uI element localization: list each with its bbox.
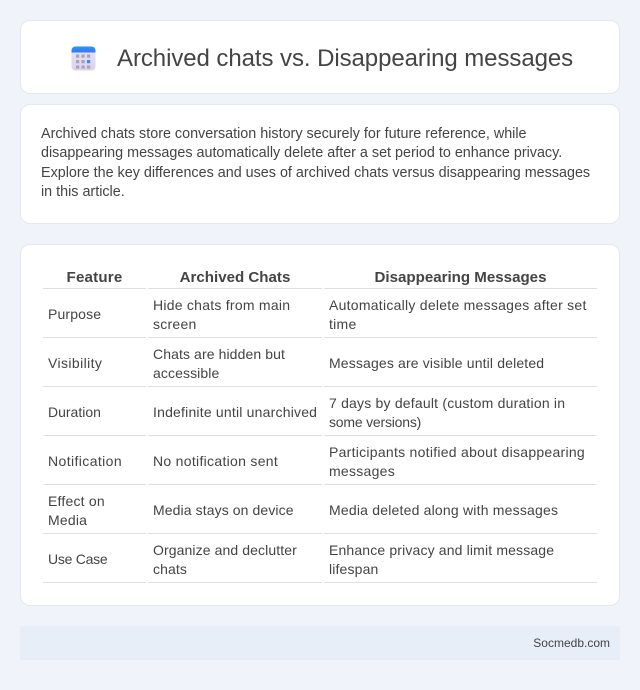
row: use case: Enhance privacy and limit message: [329, 542, 554, 558]
row: use case: Use Case: [48, 551, 107, 567]
row: effect on media: Media: [48, 512, 87, 528]
text block: introduction: disappearing messages automatically delete after a set period to enhance privacy.: [41, 145, 562, 161]
row: notification: [48, 444, 585, 479]
row: duration: Duration: [48, 404, 101, 420]
row: duration: 7 days by default (custom duration in: [329, 395, 565, 411]
table header: Disappearing Messages: [374, 269, 546, 286]
panel: introduction: [20, 104, 620, 224]
footer credit: Socmedb.com: [533, 636, 610, 650]
row: notification: No notification sent: [153, 453, 278, 469]
row: notification: messages: [329, 462, 395, 478]
row: purpose: time: [329, 316, 356, 332]
footer bar: [20, 626, 620, 660]
text block: introduction: in this article.: [41, 184, 125, 200]
row: visibility: accessible: [153, 364, 219, 380]
title: Archived chats vs. Disappearing messages: [117, 45, 573, 72]
row: purpose: screen: [153, 316, 197, 332]
table header: Archived Chats: [180, 269, 290, 286]
row: visibility: Messages are visible until deleted: [329, 355, 544, 371]
row: duration: [48, 395, 565, 430]
row: purpose: Purpose: [48, 306, 101, 322]
row: notification: Participants notified about disappearing: [329, 444, 585, 460]
row: purpose: Automatically delete messages after set: [329, 297, 587, 313]
row: visibility: Chats are hidden but: [153, 346, 285, 362]
table header: [67, 269, 546, 286]
table header: Feature: [67, 269, 122, 286]
row: duration: Indefinite until unarchived: [153, 404, 317, 420]
row: visibility: Visibility: [48, 355, 102, 371]
row: effect on media: Effect on: [48, 493, 105, 509]
row: effect on media: [48, 493, 558, 528]
text block: introduction: [41, 126, 590, 200]
row: notification: Notification: [48, 453, 122, 469]
row: visibility: [48, 346, 544, 380]
row: effect on media: Media stays on device: [153, 502, 294, 518]
row: use case: Organize and declutter: [153, 542, 297, 558]
row: use case: chats: [153, 560, 187, 576]
panel: comparison table: [20, 244, 620, 606]
row: purpose: [48, 297, 587, 332]
row: use case: lifespan: [329, 560, 378, 576]
text block: introduction: Explore the key differences and uses of archived chats versus disappearing messages: [41, 165, 590, 181]
text block: introduction: Archived chats store conversation history securely for future reference, while: [41, 126, 527, 142]
row: purpose: Hide chats from main: [153, 297, 290, 313]
row: duration: some versions): [329, 414, 421, 430]
icon: calendar: [72, 46, 96, 70]
row: effect on media: Media deleted along with messages: [329, 502, 558, 518]
panel: title card: [20, 20, 620, 94]
